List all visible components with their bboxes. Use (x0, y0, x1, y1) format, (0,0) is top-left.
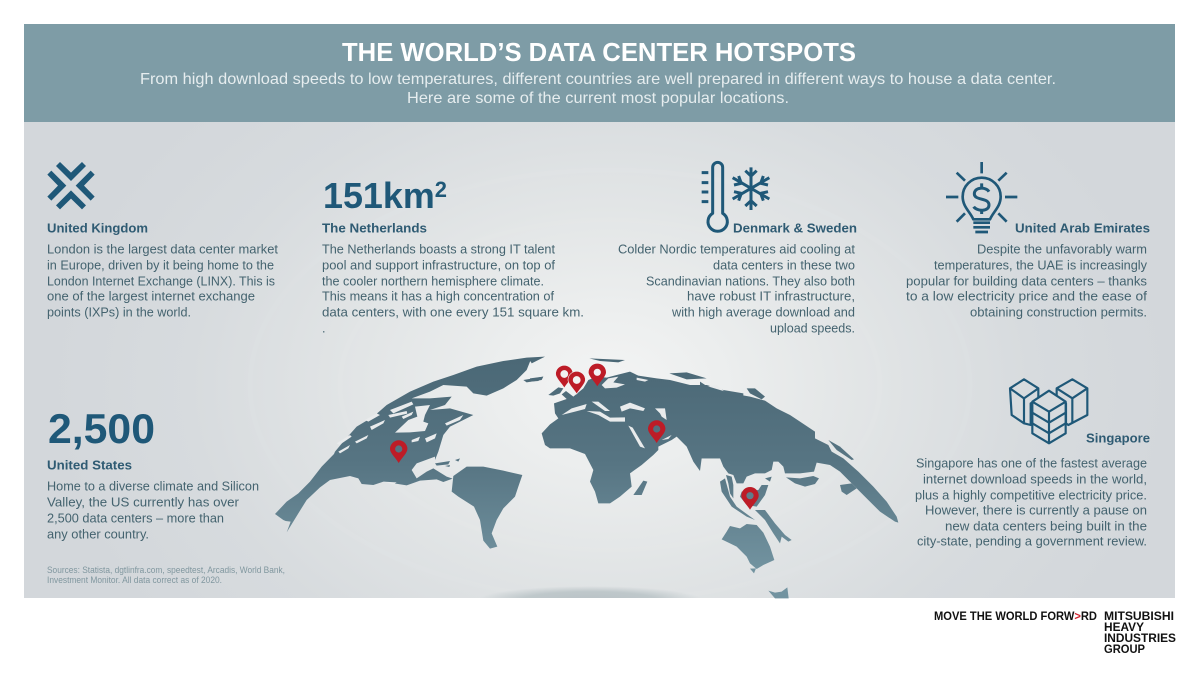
icon: thermometer and snowflake (702, 162, 769, 231)
text: Denmark and Sweden: upload speeds. (770, 322, 855, 336)
stat: 151 square km: 151km (323, 175, 435, 216)
footer tagline: MOVE THE WORLD FORW>RD (934, 609, 1097, 623)
panel: Singapore (915, 379, 1150, 548)
map: North America and Greenland (275, 357, 545, 532)
subtitle: Here are some of the current most popular locations. (407, 90, 789, 107)
footer logo: Mitsubishi Heavy Industries Group: GROUP (1104, 644, 1145, 656)
heading: United Arab Emirates: United Arab Emirates (1015, 220, 1150, 236)
footer logo: Mitsubishi Heavy Industries Group (1104, 611, 1176, 656)
text: United States: Home to a diverse climate and Silicon (47, 480, 259, 494)
text: Singapore (915, 456, 1147, 548)
footer logo: Mitsubishi Heavy Industries Group: MITSUBISHI (1104, 611, 1174, 623)
icon: server stacks (1010, 379, 1087, 443)
map: eastern Asia and Oceania (700, 382, 898, 543)
panel: Denmark and Sweden (618, 162, 857, 336)
map: Australia and southern islands (722, 524, 789, 598)
text: Singapore: internet download speeds in the world, (923, 472, 1147, 486)
text: United Kingdom: in Europe, driven by it being home to the (47, 258, 274, 272)
map: Hudson Bay and Arctic channels (337, 402, 463, 484)
sources note (47, 565, 285, 585)
text: United Arab Emirates: popular for building data centers – thanks (906, 274, 1147, 288)
panel: United States (47, 405, 259, 542)
pin: Sweden (589, 364, 606, 386)
text: Singapore: city-state, pending a government review. (917, 534, 1147, 548)
text: The Netherlands: the cooler northern hemisphere climate. (322, 274, 544, 288)
text: Denmark and Sweden: Scandinavian nations. They also both (646, 274, 855, 288)
text: United Kingdom: points (IXPs) in the world. (47, 306, 191, 320)
text: United States: 2,500 data centers – more than (47, 512, 224, 526)
subtitle: From high download speeds to low temperatures, different countries are well prepared in different ways to house a data center. (140, 71, 1056, 88)
heading: Singapore: Singapore (1086, 430, 1150, 446)
panel: United Arab Emirates (906, 162, 1150, 320)
header banner (24, 24, 1175, 122)
icon: light bulb with dollar sign (946, 162, 1017, 232)
map: Africa, Europe and western Asia (530, 357, 743, 503)
sources note: Investment Monitor. All data correct as of 2020. (47, 575, 222, 585)
text: Singapore: However, there is currently a pause on (925, 504, 1147, 518)
text: United States (47, 480, 259, 542)
subtitle (140, 71, 1056, 107)
text: United Arab Emirates: obtaining construction permits. (970, 306, 1147, 320)
pin: Netherlands (568, 371, 585, 394)
text: United Arab Emirates (906, 242, 1148, 320)
heading: United Kingdom: United Kingdom (47, 220, 148, 236)
map: inland seas (562, 377, 727, 448)
pin: United States (390, 440, 407, 463)
text: Denmark and Sweden: Colder Nordic temperatures aid cooling at (618, 242, 856, 256)
text: The Netherlands: data centers, with one every 151 square km. (322, 306, 584, 320)
text: United Kingdom: London is the largest data center market (47, 242, 279, 256)
text: The Netherlands: pool and support infrastructure, on top of (322, 258, 555, 272)
heading: The Netherlands: The Netherlands (322, 220, 427, 236)
heading: Denmark and Sweden: Denmark & Sweden (733, 220, 857, 236)
footer logo: Mitsubishi Heavy Industries Group: INDUSTRIES (1104, 633, 1176, 645)
map pins (390, 364, 759, 510)
sources note: Sources: Statista, dgtlinfra.com, speedtest, Arcadis, World Bank, (47, 565, 285, 575)
text: United States: Valley, the US currently has over (47, 496, 239, 510)
text: The Netherlands (322, 242, 584, 336)
text: The Netherlands: . (322, 322, 326, 336)
text: United Kingdom: one of the largest internet exchange (47, 290, 255, 304)
text: Singapore: Singapore has one of the fastest average (916, 456, 1147, 470)
heading: United States: United States (47, 458, 132, 472)
text: Denmark and Sweden: with high average download and (671, 306, 855, 320)
pin: Singapore (741, 487, 759, 510)
text: Singapore: plus a highly competitive electricity price. (915, 488, 1147, 502)
panel: background (24, 122, 1175, 614)
text: United Arab Emirates: Despite the unfavorably warm (977, 242, 1147, 256)
stat: 151 square km: 2 (435, 177, 447, 202)
text: United Arab Emirates: to a low electricity price and the ease of (906, 290, 1148, 304)
text: Denmark and Sweden: have robust IT infrastructure, (687, 290, 855, 304)
icon: LINX crossed chevrons (47, 162, 95, 209)
pin: UAE (648, 420, 665, 443)
text: Denmark and Sweden: data centers in these two (713, 258, 855, 272)
panel: The Netherlands (322, 175, 584, 336)
pin: United Kingdom (556, 365, 573, 388)
text: The Netherlands: This means it has a high concentration of (322, 290, 554, 304)
panel: United Kingdom (47, 162, 279, 320)
text: Denmark and Sweden (618, 242, 856, 336)
text: United Arab Emirates: temperatures, the UAE is increasingly (934, 258, 1148, 272)
text: The Netherlands: The Netherlands boasts a strong IT talent (322, 242, 556, 256)
title: THE WORLD’S DATA CENTER HOTSPOTS (342, 37, 856, 67)
stat: 2,500 data centers: 2,500 (48, 405, 155, 452)
footer logo: Mitsubishi Heavy Industries Group: HEAVY (1104, 622, 1144, 634)
text: United Kingdom (47, 242, 279, 320)
text: United Kingdom: London Internet Exchange (LINX). This is (47, 274, 275, 288)
map: South America (452, 467, 522, 549)
world map (275, 357, 898, 598)
text: United States: any other country. (47, 528, 149, 542)
text: Singapore: new data centers being built in the (945, 520, 1147, 534)
